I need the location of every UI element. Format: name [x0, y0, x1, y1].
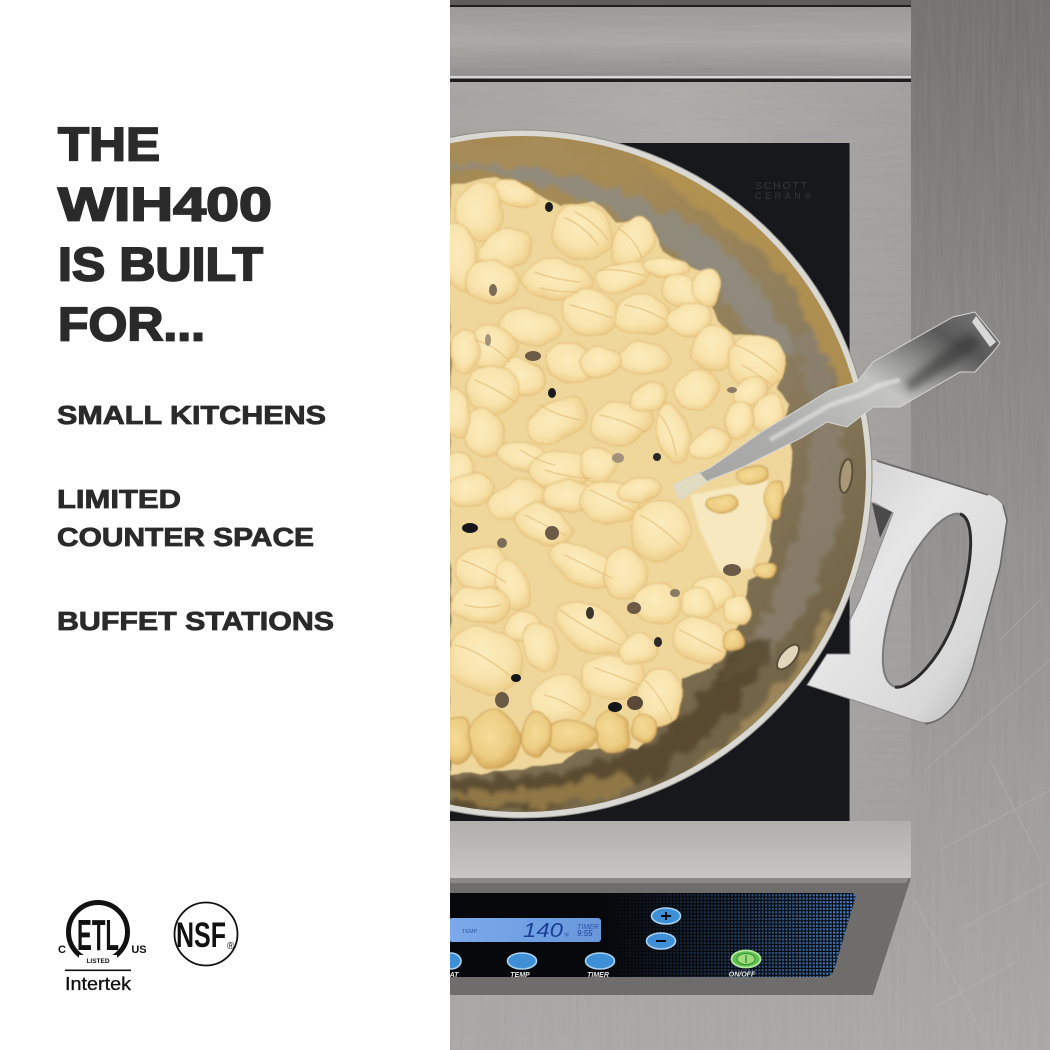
LCD display: 140 — [523, 920, 563, 942]
pan rim — [450, 130, 872, 818]
LCD display: 9:55 — [577, 929, 593, 938]
ceramic glass cooking surface: SCHOTT — [755, 180, 808, 192]
text block: use cases — [57, 402, 334, 636]
panel: white text column — [0, 0, 450, 1050]
pepper and mushroom bits — [462, 202, 741, 712]
front control panel: TEMP — [510, 972, 530, 979]
pan interior wall — [450, 136, 866, 812]
LCD display: TEMP — [462, 929, 478, 935]
title: IS BUILT — [58, 238, 263, 292]
ceramic glass cooking surface — [450, 143, 850, 821]
title: FOR... — [58, 298, 205, 352]
icon: ETL listed Intertek mark: Intertek — [65, 973, 132, 994]
pan handle — [807, 458, 1007, 724]
front control panel — [441, 878, 911, 995]
title: WIH400 — [58, 178, 272, 232]
counter surface — [450, 0, 1050, 1050]
front control panel: TIMER — [587, 972, 609, 979]
macaroni and cheese — [438, 174, 795, 773]
photo: induction cooktop with pan of macaroni — [450, 0, 1050, 1050]
pasta ridges — [455, 212, 778, 720]
front control panel: AT — [449, 972, 459, 979]
rivets — [773, 458, 854, 673]
control buttons — [441, 908, 680, 969]
cream pool — [690, 480, 768, 572]
icon: NSF mark: ® — [227, 941, 235, 952]
icon: ETL listed Intertek mark: LISTED — [86, 958, 110, 965]
LCD display — [449, 918, 601, 942]
icon: NSF mark: NSF — [176, 916, 226, 955]
icon: NSF mark — [174, 902, 238, 966]
icon: ETL listed Intertek mark — [58, 902, 147, 994]
icon: ETL listed Intertek mark: US — [131, 944, 147, 956]
icon: ETL listed Intertek mark: ETL — [77, 911, 119, 960]
text block: use cases: COUNTER SPACE — [57, 524, 314, 552]
text block: use cases: LIMITED — [57, 486, 181, 514]
LCD display: TIMER — [577, 924, 599, 931]
cooktop body — [450, 0, 911, 880]
spoon — [673, 312, 1000, 500]
LCD display: °F — [564, 933, 569, 939]
title: THE — [58, 118, 160, 172]
ceramic glass cooking surface: CERAN® — [755, 191, 811, 201]
title — [58, 118, 272, 352]
text block: use cases: BUFFET STATIONS — [57, 608, 334, 636]
text block: use cases: SMALL KITCHENS — [57, 402, 326, 430]
front control panel: ON/OFF — [729, 972, 756, 978]
icon: ETL listed Intertek mark: C — [58, 944, 66, 956]
power button — [732, 950, 760, 968]
